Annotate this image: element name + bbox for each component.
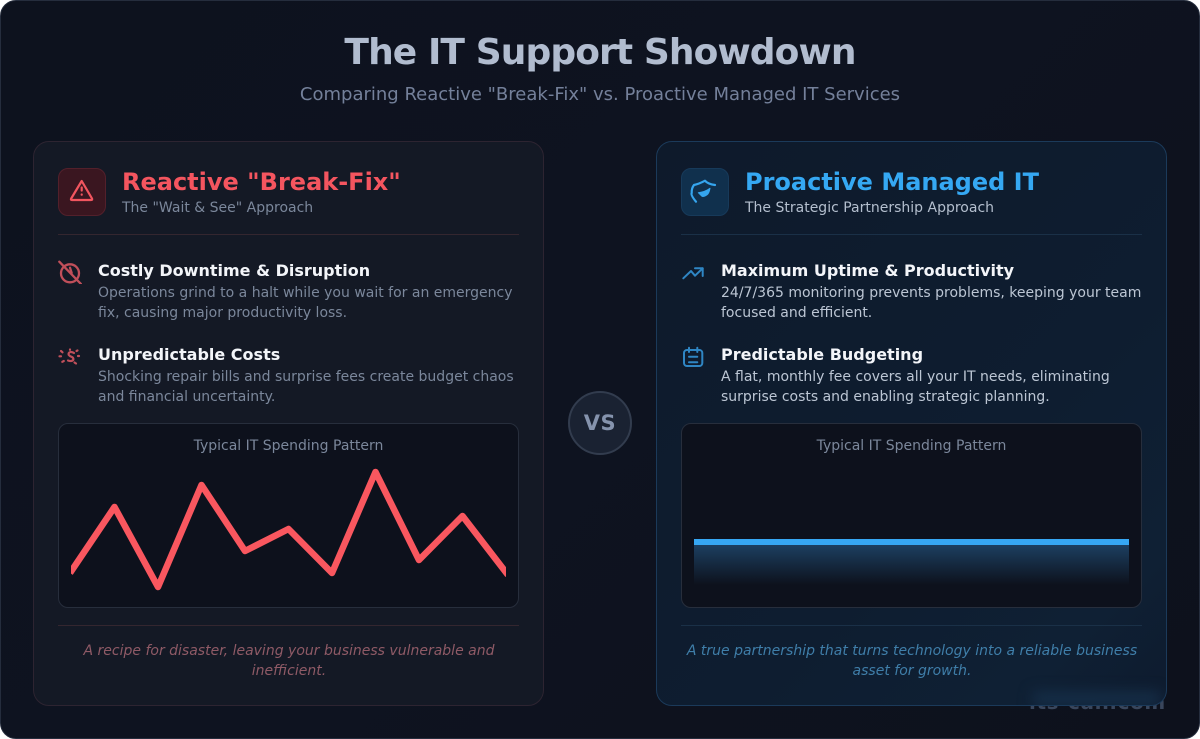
vs badge (568, 391, 632, 455)
icon: shield (681, 168, 729, 216)
feature text: uptime (721, 285, 1141, 321)
feature text: uptime: 24/7/365 monitoring prevents problems, keeping your team (721, 285, 1141, 301)
subheading: proactive: The Strategic Partnership Approach (745, 200, 994, 216)
feature title: downtime: Costly Downtime & Disruption (98, 261, 370, 280)
chart title: Typical IT Spending Pattern (194, 438, 383, 454)
feature text: budgeting (721, 369, 1110, 405)
watermark: its-can.com (1029, 690, 1166, 714)
feature text: budgeting: A flat, monthly fee covers all your IT needs, eliminating (721, 369, 1110, 385)
icon: trending up (682, 267, 704, 280)
chart: erratic spending (58, 423, 519, 608)
feature text: costs (98, 369, 514, 405)
feature text: budgeting: surprise costs and enabling strategic planning. (721, 389, 1050, 405)
flat spending line (694, 539, 1129, 585)
chart title: Typical IT Spending Pattern (817, 438, 1006, 454)
panel: reactive break-fix (33, 141, 544, 706)
feature text: downtime (98, 285, 513, 321)
feature text: costs: Shocking repair bills and surprise fees create budget chaos (98, 369, 514, 385)
title: The IT Support Showdown (344, 32, 856, 73)
subtitle: Comparing Reactive "Break-Fix" vs. Proactive Managed IT Services (300, 84, 900, 105)
spending line (71, 468, 506, 590)
panel: proactive managed it (656, 141, 1167, 706)
blurred watermark glow (1033, 692, 1161, 706)
icon: calendar (683, 346, 704, 367)
icon: downtime (58, 260, 82, 284)
heading: proactive: Proactive Managed IT (745, 168, 1039, 196)
feature text: downtime: fix, causing major productivity loss. (98, 305, 347, 321)
subheading: reactive: The "Wait & See" Approach (122, 200, 313, 216)
feature text: uptime: focused and efficient. (721, 305, 872, 321)
feature title: budgeting: Predictable Budgeting (721, 345, 923, 364)
footer note: proactive: A true partnership that turns technology into a reliable business asset for growth. (687, 643, 1137, 679)
chart: flat spending (681, 423, 1142, 608)
vs badge: VS (584, 411, 616, 435)
footer note: reactive: A recipe for disaster, leaving your business vulnerable and inefficient. (84, 643, 494, 679)
feature text: downtime: Operations grind to a halt while you wait for an emergency (98, 285, 513, 301)
icon: unpredictable costs (58, 348, 80, 365)
feature title: uptime: Maximum Uptime & Productivity (721, 261, 1014, 280)
icon: warning triangle (58, 168, 106, 216)
feature title: costs: Unpredictable Costs (98, 345, 280, 364)
heading: reactive: Reactive "Break-Fix" (122, 168, 401, 196)
feature text: costs: and financial uncertainty. (98, 389, 275, 405)
